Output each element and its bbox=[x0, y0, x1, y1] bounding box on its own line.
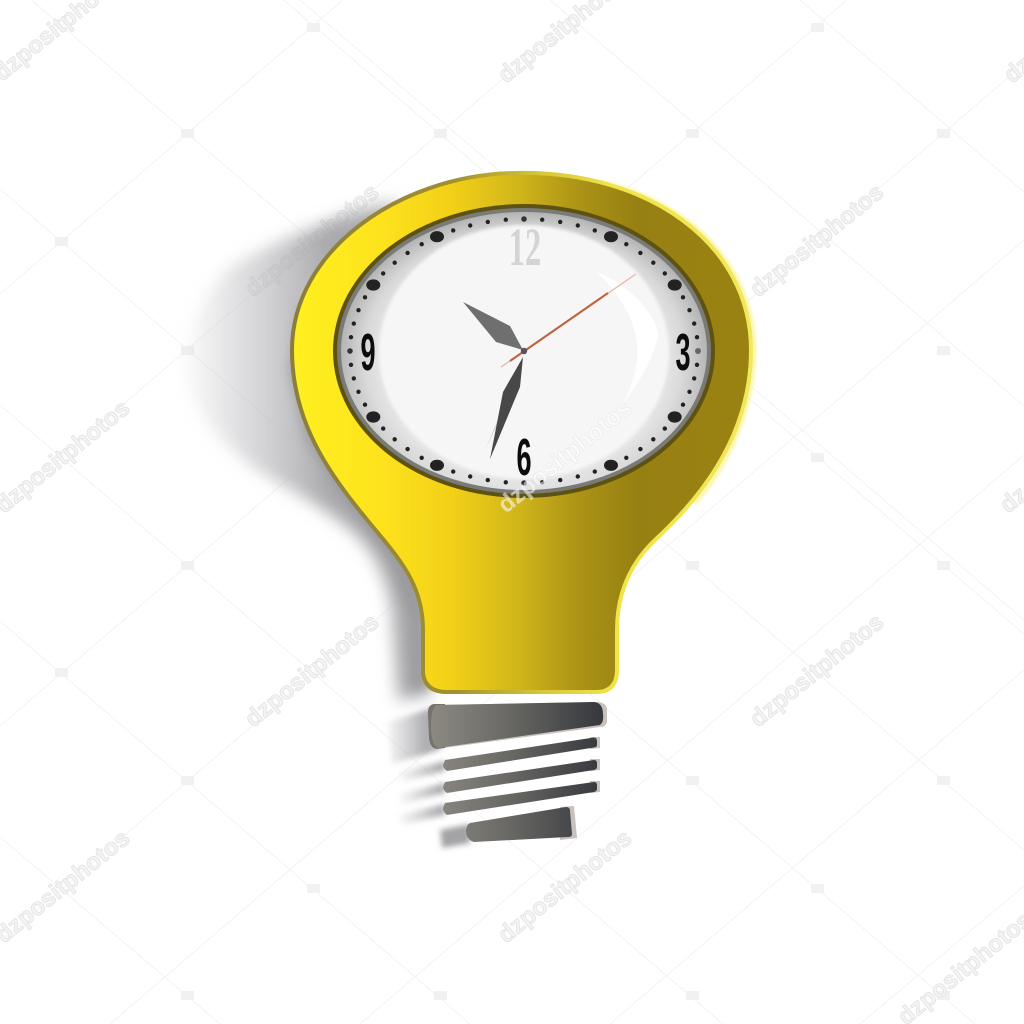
watermark text: dzpositphotos bbox=[240, 608, 384, 733]
numeral 3: 3 bbox=[675, 322, 691, 381]
hour hand bbox=[463, 302, 523, 350]
base cap bbox=[428, 702, 607, 749]
watermark text: dzpositphotos bbox=[240, 178, 384, 303]
clock inner ring bbox=[337, 208, 711, 494]
base tip bbox=[466, 806, 577, 842]
base thread shadows bbox=[388, 707, 470, 848]
clock bezel bbox=[333, 204, 715, 498]
bulb base screw bbox=[428, 702, 607, 842]
thread 1 bbox=[443, 737, 600, 771]
glass bbox=[379, 225, 669, 479]
minute ticks bbox=[350, 219, 698, 483]
thread 2 bbox=[443, 759, 600, 793]
watermark text: dzpositphotos bbox=[745, 608, 889, 733]
numeral 12: 12 bbox=[509, 216, 541, 277]
watermark text: dzpositphotos bbox=[745, 178, 889, 303]
thread 3 bbox=[443, 781, 600, 815]
numeral 9: 9 bbox=[360, 322, 376, 381]
watermark text: dzpositphotos bbox=[493, 824, 637, 949]
center pin bbox=[521, 348, 527, 354]
bulb body bbox=[292, 173, 751, 692]
bulb glow edge bbox=[600, 182, 754, 503]
hand shadow bbox=[485, 360, 522, 450]
watermark over clock: dzpositphotos bbox=[493, 394, 637, 519]
second hand bbox=[501, 274, 636, 367]
numeral 6: 6 bbox=[516, 427, 532, 486]
glare highlight bbox=[597, 272, 658, 402]
bulb cast shadow bbox=[187, 200, 430, 700]
clock face bbox=[333, 204, 715, 498]
minute hand bbox=[490, 357, 523, 459]
dial bbox=[341, 212, 707, 490]
